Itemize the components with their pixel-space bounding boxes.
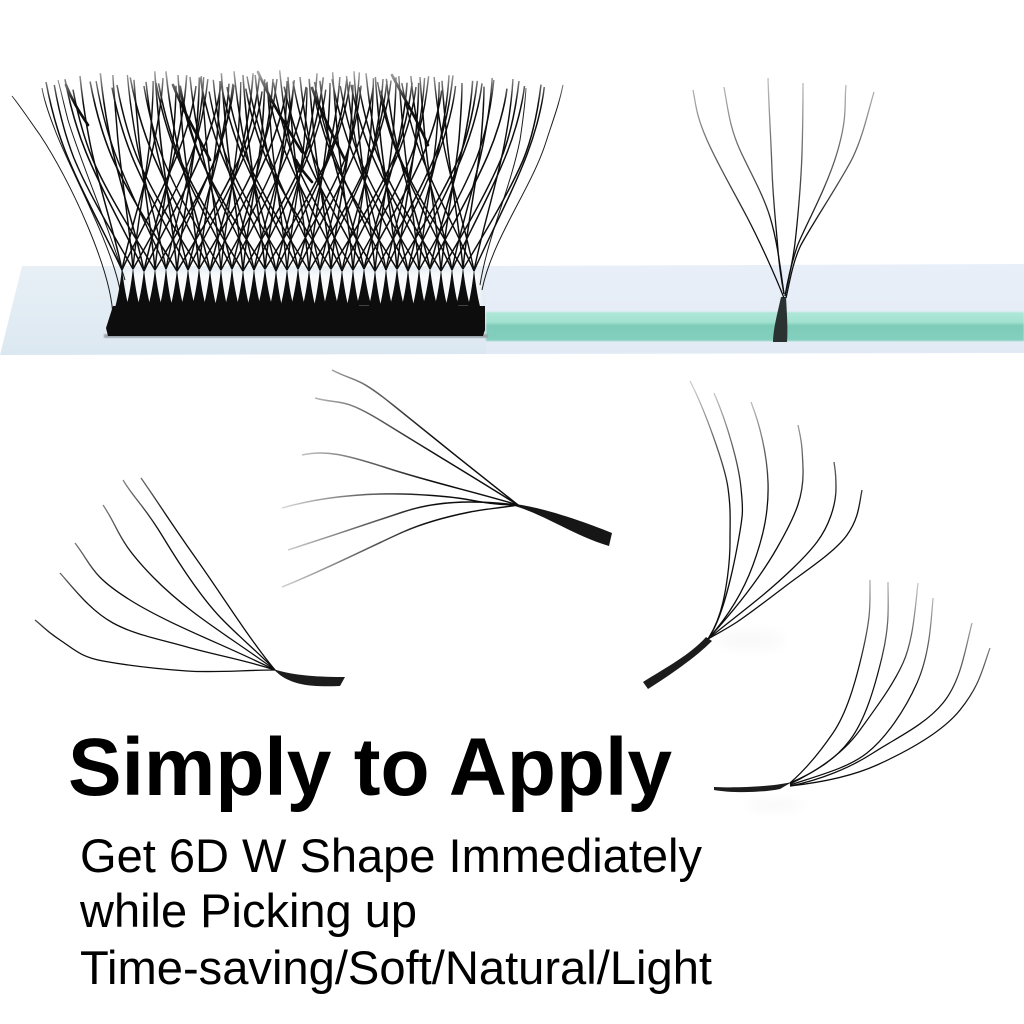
loose lash: upper centre [282,370,612,587]
lash tray strip [0,264,1024,355]
loose lash: upper right [643,381,862,689]
dense crossing fans [46,70,544,310]
loose lash: lower right [714,580,990,810]
description text: while Picking up [79,884,417,937]
heavier dark lash streaks [66,72,428,182]
description text [79,829,712,994]
fade over lash tips [0,62,600,104]
lash strip: full row of W-shape fans [12,70,563,336]
dark lash base band [106,306,485,336]
description text: Time-saving/Soft/Natural/Light [80,941,712,994]
single lash fan on strip [693,78,874,342]
title: Simply to Apply [68,722,672,813]
soft shadow [745,800,805,810]
description text: Get 6D W Shape Immediately [80,829,702,882]
green adhesive band [486,312,1024,341]
loose lash: lower left [35,478,345,686]
soft shadow [715,630,785,650]
long outer lashes [12,80,563,318]
